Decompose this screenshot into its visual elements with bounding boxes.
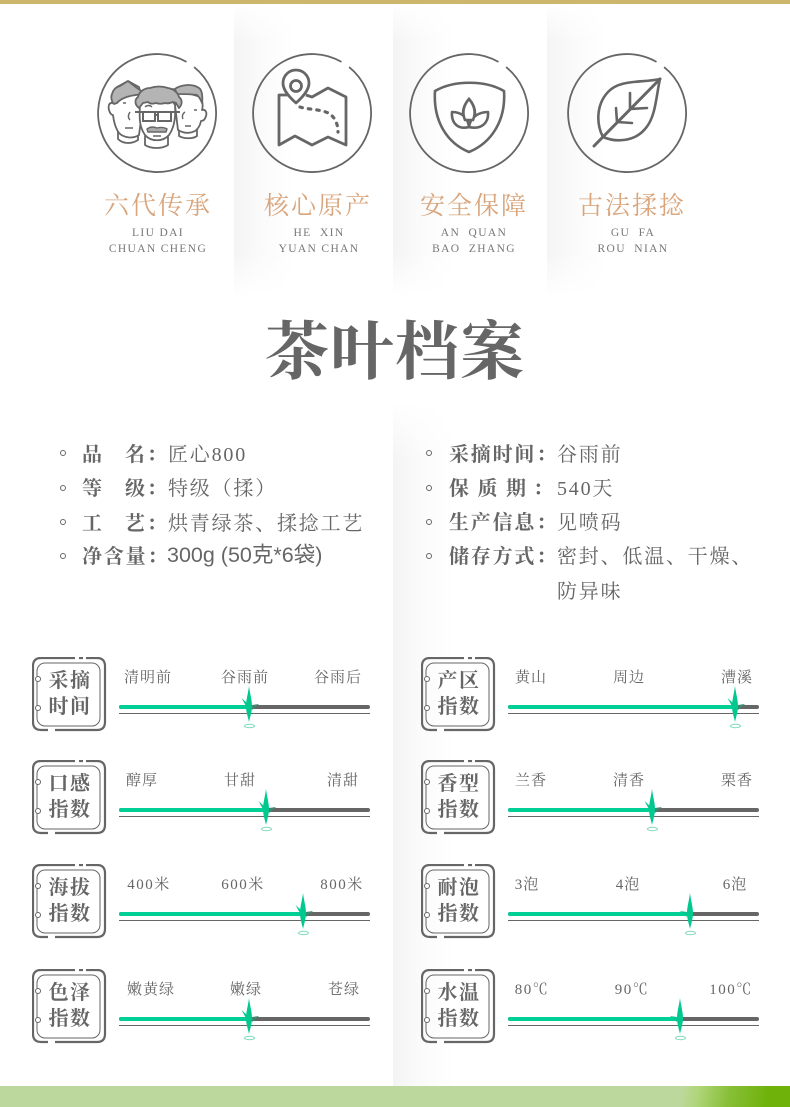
等级: 等 [82, 478, 104, 500]
scale labels: 苍绿 [328, 982, 360, 998]
采摘时间: 采摘时间： [449, 444, 558, 466]
pinyin: GU FA ROU NIAN [598, 227, 668, 254]
scale labels: 100℃ [709, 982, 753, 998]
badge: 指数 [48, 1008, 92, 1030]
生产信息: 生产信息： [449, 512, 558, 534]
scale labels: 漕溪 [721, 670, 753, 686]
badge [421, 969, 497, 1045]
scale labels: 嫩黄绿 [127, 982, 175, 998]
slider [119, 1017, 370, 1037]
badge: 指数 [438, 799, 480, 821]
title: 茶叶档案 [265, 317, 525, 388]
badge: 指数 [438, 696, 480, 718]
feature: 六代传承 [97, 53, 217, 254]
采摘时间: 谷雨前 [557, 444, 622, 466]
marker [644, 789, 662, 832]
工艺: 烘青绿茶、揉捻工艺 [168, 513, 364, 535]
icon: leaf [567, 53, 687, 173]
净含量: 300g (50克*6袋) [167, 543, 322, 567]
row: 水温指数 [421, 967, 761, 1045]
scale labels [32, 862, 372, 902]
badge: 指数 [438, 903, 480, 925]
保质期: ： [533, 478, 555, 500]
scale labels [515, 669, 753, 686]
等级: 特级（揉） [168, 478, 277, 500]
scale labels: 谷雨前 [221, 670, 269, 686]
badge [32, 657, 106, 732]
badge: 产区 [438, 670, 480, 692]
marker [728, 686, 745, 728]
scale labels: 栗香 [721, 773, 753, 789]
info list: left [60, 444, 364, 568]
badge: 香型 [438, 773, 480, 795]
slider [508, 705, 759, 714]
等级: 级： [125, 478, 169, 500]
badge: 指数 [48, 799, 92, 821]
badge: 指数 [438, 1008, 480, 1030]
heading: 安全保障 [420, 193, 528, 220]
等级 [60, 478, 277, 500]
badge: 口感 [48, 773, 92, 795]
scale labels: 兰香 [515, 773, 547, 789]
badge: 指数 [48, 903, 92, 925]
scale labels: 醇厚 [126, 773, 158, 789]
scale labels: 400米 [127, 877, 171, 893]
采摘时间 [426, 444, 622, 466]
pinyin: AN QUAN BAO ZHANG [432, 227, 516, 254]
scale labels: 80℃ [515, 982, 549, 998]
slider [508, 912, 759, 932]
slider [119, 912, 370, 932]
scale labels [515, 772, 753, 789]
badge [32, 969, 108, 1045]
生产信息: 见喷码 [557, 512, 622, 534]
marker [291, 892, 315, 936]
scale labels: 6泡 [723, 877, 747, 893]
scale labels: 甘甜 [224, 773, 256, 789]
marker [242, 686, 259, 728]
保质期 [426, 478, 614, 500]
row: 耐泡指数 [421, 862, 761, 940]
scale labels: 清香 [613, 773, 645, 789]
row: 色泽指数 [32, 967, 372, 1045]
slider [119, 705, 370, 714]
scale labels [126, 772, 359, 789]
scale labels [32, 967, 372, 1007]
scale labels [421, 967, 761, 1007]
pinyin: HE XIN YUAN CHAN [279, 227, 359, 254]
净含量 [60, 543, 322, 568]
保质期: 保质期 [449, 478, 534, 500]
slider [508, 808, 759, 817]
heading: 古法揉捻 [578, 193, 686, 220]
badge: 水温 [438, 982, 480, 1004]
scale labels [124, 669, 362, 686]
保质期: 540天 [557, 478, 614, 500]
marker [258, 789, 276, 832]
row: 香型指数 [421, 760, 759, 834]
scale labels: 清甜 [327, 773, 359, 789]
feature: 安全保障 [409, 53, 529, 254]
品名: 匠心800 [168, 444, 247, 466]
scale labels: 黄山 [515, 670, 547, 686]
row: 海拔指数 [32, 864, 370, 938]
icon: map with pin [252, 53, 372, 173]
scale labels: 90℃ [615, 982, 649, 998]
bottom green band [0, 1086, 790, 1107]
工艺: 工 [82, 513, 104, 535]
badge [32, 760, 106, 834]
badge [421, 657, 496, 732]
badge: 海拔 [48, 877, 92, 899]
品名: 名： [125, 444, 169, 466]
slider [119, 808, 370, 817]
scale labels [421, 862, 761, 902]
scale labels: 3泡 [515, 877, 539, 893]
badge: 采摘 [48, 670, 92, 692]
scale labels: 4泡 [616, 877, 640, 893]
净含量: 净含量： [82, 546, 169, 568]
top gold bar [0, 0, 790, 4]
scale labels: 周边 [613, 670, 645, 686]
icon: three generations of faces [97, 53, 217, 173]
feature: 核心原产 [252, 53, 372, 254]
scale labels: 600米 [221, 877, 265, 893]
scale labels: 清明前 [124, 670, 172, 686]
工艺 [60, 512, 364, 535]
background shading columns [234, 33, 560, 1086]
badge [421, 760, 496, 834]
badge: 时间 [48, 696, 92, 718]
scale labels: 嫩绿 [230, 982, 262, 998]
品名: 品 [82, 444, 104, 466]
heading: 核心原产 [264, 193, 372, 220]
badge [421, 864, 497, 940]
marker [668, 997, 692, 1041]
heading: 六代传承 [104, 193, 212, 220]
pinyin: LIU DAI CHUAN CHENG [109, 227, 207, 254]
marker [678, 892, 702, 936]
marker [237, 997, 261, 1041]
储存方式: 储存方式： [449, 546, 558, 568]
品名 [60, 444, 247, 466]
info list: right [426, 444, 753, 603]
储存方式 [426, 546, 753, 603]
row: 产区指数 [421, 657, 759, 732]
工艺: 艺： [125, 513, 169, 535]
slider [508, 1017, 759, 1037]
feature: 古法揉捻 [567, 53, 687, 254]
储存方式: 密封、低温、干燥、 防异味 [557, 546, 753, 603]
scale labels: 谷雨后 [314, 670, 362, 686]
icon: shield with leaf [409, 53, 529, 173]
scale labels: 800米 [320, 877, 364, 893]
生产信息 [426, 512, 622, 534]
badge [32, 864, 106, 938]
row: 口感指数 [32, 760, 370, 834]
row: 采摘时间 [32, 657, 370, 732]
badge: 耐泡 [438, 877, 480, 899]
badge: 色泽 [48, 982, 92, 1004]
